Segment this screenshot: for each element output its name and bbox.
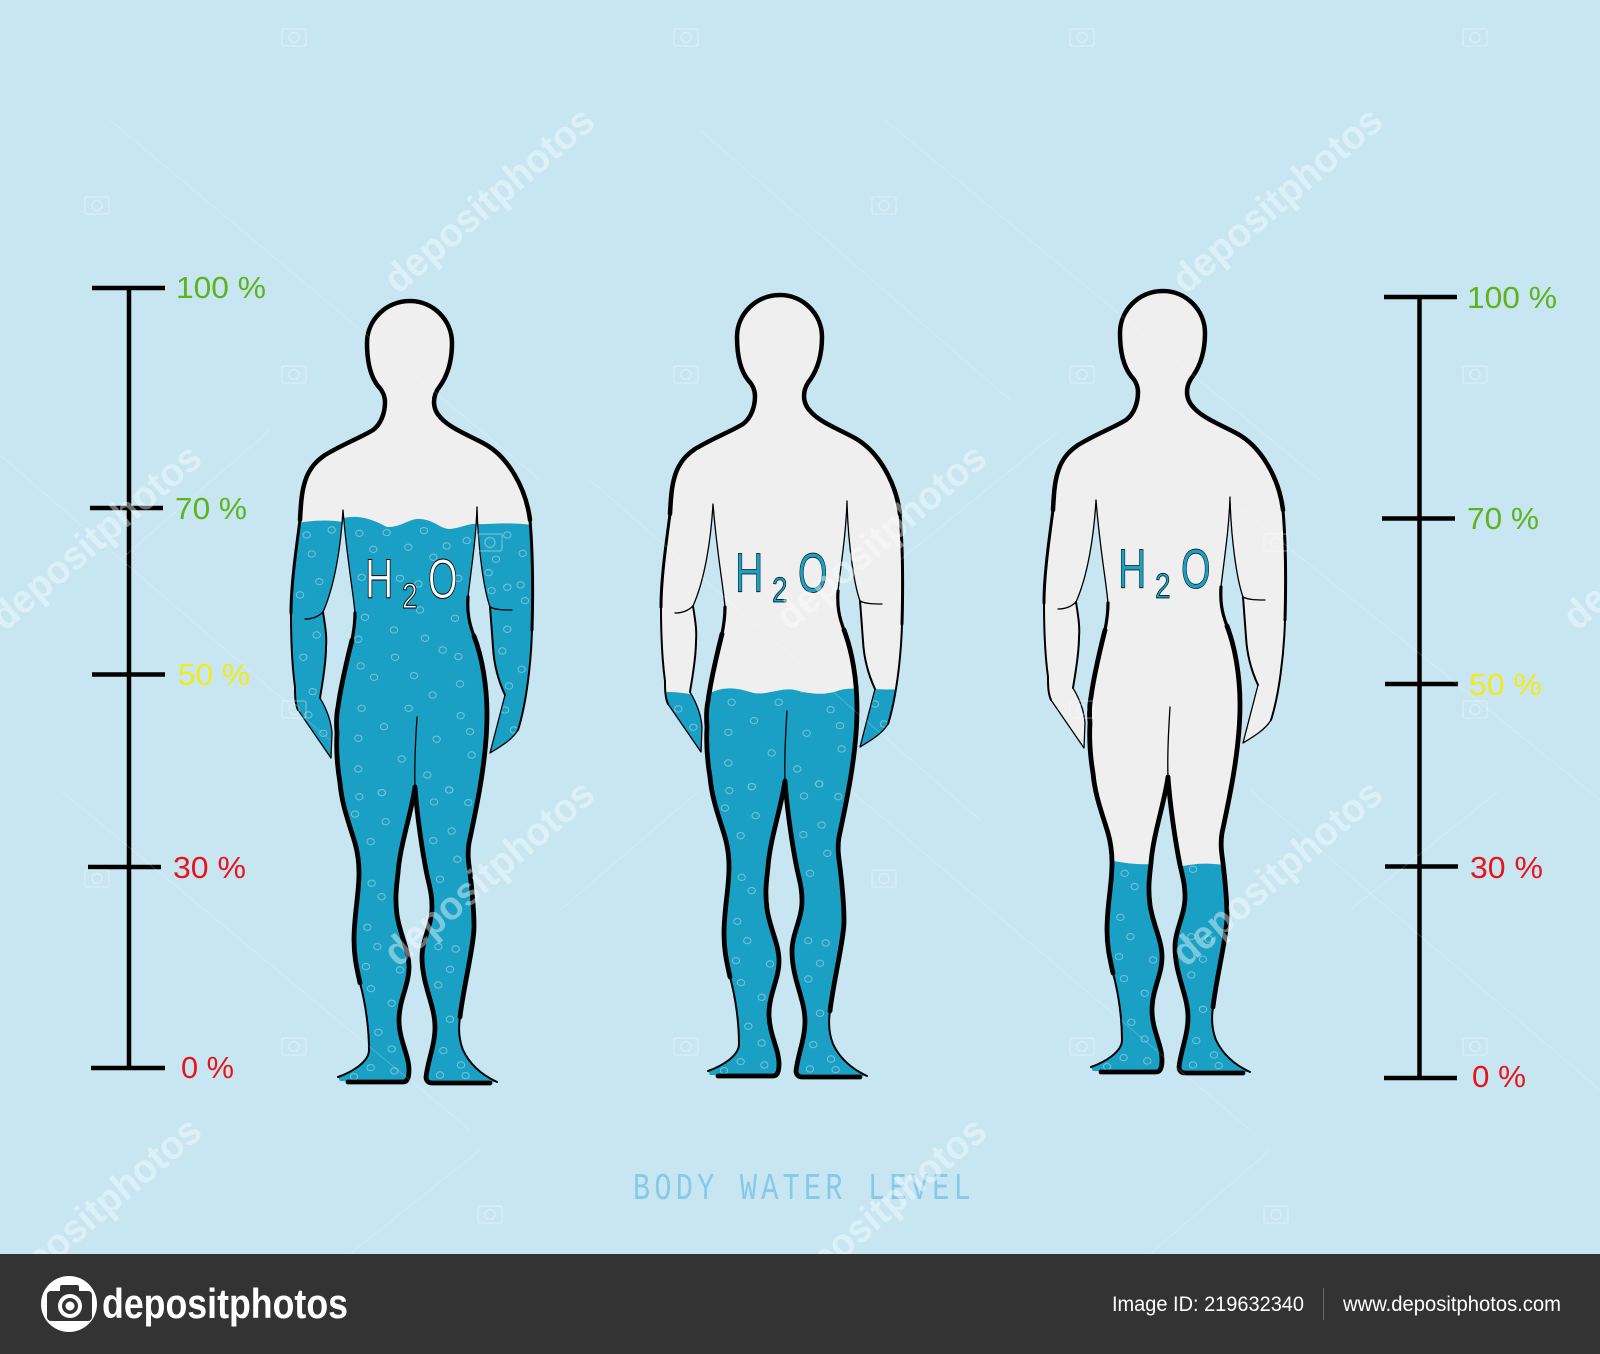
left scale labels <box>173 270 266 1085</box>
watermark text: depositphotos <box>767 435 995 639</box>
figure: high water level <box>290 298 534 1086</box>
H2O label: O <box>798 543 828 605</box>
right scale labels: 30 % <box>1470 850 1543 885</box>
watermark text: depositphotos <box>375 98 603 302</box>
H2O label: O <box>428 549 458 611</box>
watermark text: depositphotos <box>375 771 603 975</box>
website: www.depositphotos.com <box>1342 1293 1561 1316</box>
left scale labels: 0 % <box>181 1050 234 1085</box>
right scale labels <box>1467 280 1557 1094</box>
watermark text: depositphotos <box>1163 98 1391 302</box>
logo wordmark: depositphotos <box>102 1280 348 1327</box>
H2O label <box>735 542 828 610</box>
right scale axis and ticks <box>1382 297 1458 1078</box>
figure: medium water level <box>660 292 904 1080</box>
H2O label: H <box>735 542 763 605</box>
watermark camera icons <box>85 29 1487 1223</box>
left percentage scale <box>88 270 266 1085</box>
right percentage scale <box>1382 280 1557 1094</box>
right scale labels: 70 % <box>1467 501 1539 536</box>
watermark text: depositphotos <box>1163 771 1391 975</box>
H2O label: H <box>1118 538 1146 601</box>
H2O label: 2 <box>1155 566 1171 606</box>
H2O label: 2 <box>402 576 418 616</box>
left scale axis and ticks <box>88 288 165 1068</box>
figure: low water level <box>1044 291 1286 1090</box>
watermark text: depositphotos <box>767 1108 995 1312</box>
H2O label: H <box>365 548 393 611</box>
right scale labels: 50 % <box>1469 667 1542 702</box>
left scale labels: 50 % <box>178 657 250 692</box>
left scale labels: 30 % <box>173 850 246 885</box>
H2O label: O <box>1181 539 1211 601</box>
image id: Image ID: 219632340 <box>1112 1293 1304 1316</box>
logo icon <box>41 1276 97 1332</box>
left scale labels: 70 % <box>175 491 247 526</box>
H2O label <box>365 548 458 616</box>
left scale labels: 100 % <box>176 270 266 305</box>
H2O label <box>1118 538 1211 606</box>
caption: BODY WATER LEVEL <box>633 1168 975 1211</box>
right scale labels: 100 % <box>1467 280 1557 315</box>
footer bar <box>0 1254 1600 1354</box>
right scale labels: 0 % <box>1472 1059 1526 1094</box>
H2O label: 2 <box>772 570 788 610</box>
